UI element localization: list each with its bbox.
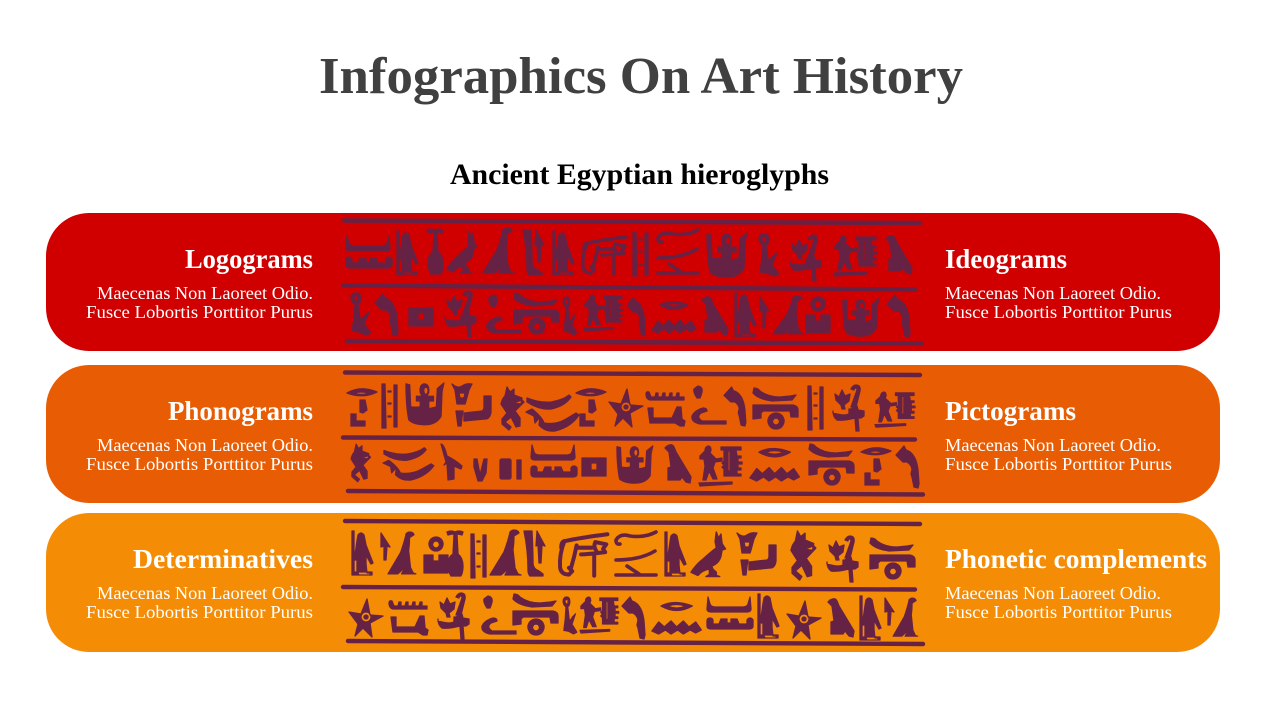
panel background amber xyxy=(46,513,1220,652)
panel background orange xyxy=(46,365,1220,503)
text block: Pictograms description: Maecenas Non Laoreet Odio. xyxy=(945,435,1161,455)
text block: Phonograms description xyxy=(86,435,313,474)
subtitle: Ancient Egyptian hieroglyphs xyxy=(450,158,829,191)
text block: Phonograms description: Maecenas Non Laoreet Odio. xyxy=(97,435,313,455)
panel: Determinatives and Phonetic complements xyxy=(46,513,1220,652)
text block: Phonetic complements description: Maecenas Non Laoreet Odio. xyxy=(945,583,1161,603)
text block: Determinatives description: Fusce Lobortis Porttitor Purus xyxy=(86,602,313,622)
text block: Ideograms description: Fusce Lobortis Porttitor Purus xyxy=(945,302,1172,322)
heading: Logograms: Logograms xyxy=(185,244,313,274)
text block: Logograms description: Maecenas Non Laoreet Odio. xyxy=(97,283,313,303)
heading: Pictograms: Pictograms xyxy=(945,396,1076,426)
text block: Pictograms description xyxy=(945,435,1172,474)
text block: Determinatives description: Maecenas Non Laoreet Odio. xyxy=(97,583,313,603)
heading: Determinatives: Determinatives xyxy=(133,544,313,574)
text block: Logograms description: Fusce Lobortis Porttitor Purus xyxy=(86,302,313,322)
panel: Logograms and Ideograms xyxy=(46,213,1220,351)
text block: Ideograms description: Maecenas Non Laoreet Odio. xyxy=(945,283,1161,303)
text block: Pictograms description: Fusce Lobortis Porttitor Purus xyxy=(945,454,1172,474)
heading: Phonograms: Phonograms xyxy=(168,396,313,426)
hieroglyph strip 3 xyxy=(343,521,923,644)
text block: Logograms description xyxy=(86,283,313,322)
text block: Ideograms description xyxy=(945,283,1172,322)
text block: Phonetic complements description: Fusce Lobortis Porttitor Purus xyxy=(945,602,1172,622)
hieroglyph strip 1 xyxy=(343,220,922,344)
hieroglyph strip 2 xyxy=(343,372,923,494)
panel background red xyxy=(46,213,1220,351)
heading: Phonetic complements: Phonetic complements xyxy=(945,544,1207,574)
heading: Ideograms: Ideograms xyxy=(945,244,1067,274)
panel: Phonograms and Pictograms xyxy=(46,365,1220,503)
text block: Determinatives description xyxy=(86,583,313,622)
text block: Phonograms description: Fusce Lobortis Porttitor Purus xyxy=(86,454,313,474)
title: Infographics On Art History xyxy=(319,48,963,105)
text block: Phonetic complements description xyxy=(945,583,1172,622)
